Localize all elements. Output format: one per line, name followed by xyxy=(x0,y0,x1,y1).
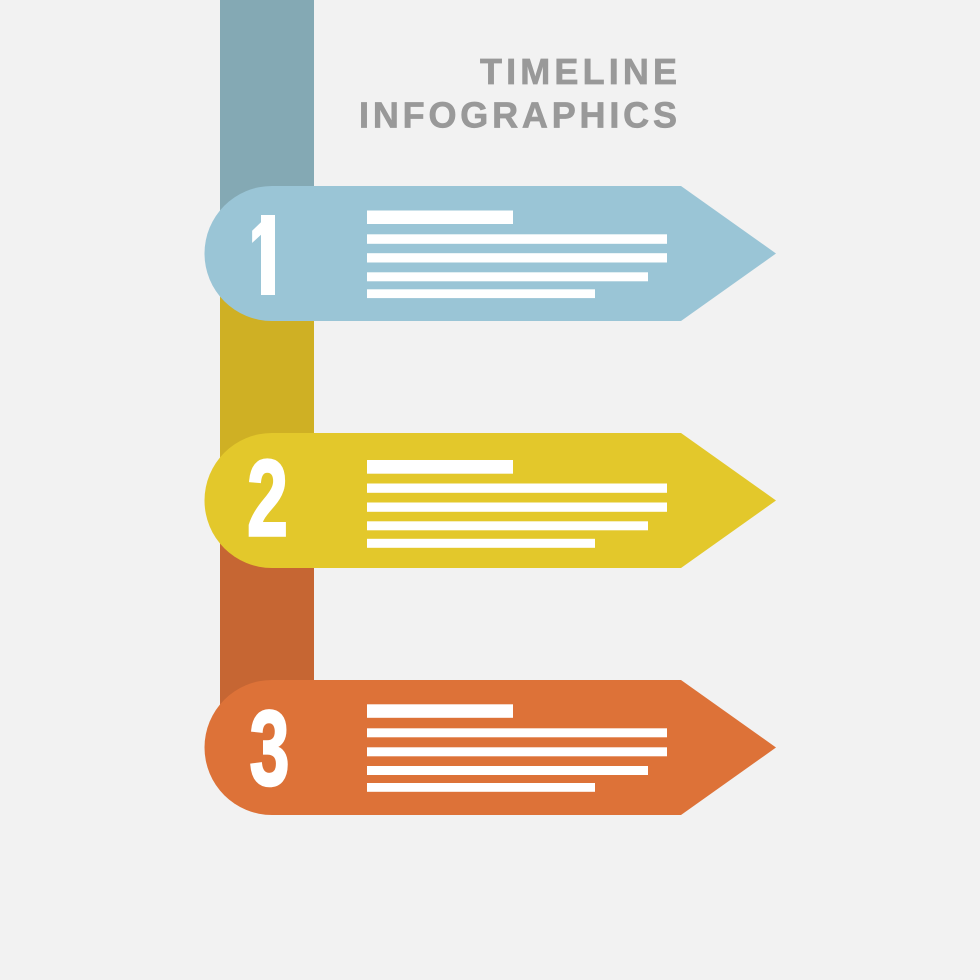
number 1: 1 xyxy=(247,194,289,320)
panel: step 2 xyxy=(204,433,776,568)
text lines 2 xyxy=(367,460,667,548)
text lines 1 xyxy=(367,210,667,298)
timeline column: yellow segment xyxy=(220,290,314,470)
panel: step 3 xyxy=(204,680,776,815)
number 3: 3 xyxy=(250,688,290,808)
timeline column: blue segment xyxy=(220,0,314,230)
panel: step 1 xyxy=(204,186,776,321)
title: TIMELINE xyxy=(480,51,677,92)
title xyxy=(359,51,677,136)
number 1 xyxy=(252,215,275,295)
number 2: 2 xyxy=(247,438,288,560)
arrow banner 1 xyxy=(204,186,776,321)
text lines 3 xyxy=(367,704,667,792)
timeline column: orange segment xyxy=(220,540,314,720)
arrow banner 3 xyxy=(204,680,776,815)
title: INFOGRAPHICS xyxy=(359,94,677,136)
arrow banner 2 xyxy=(204,433,776,568)
